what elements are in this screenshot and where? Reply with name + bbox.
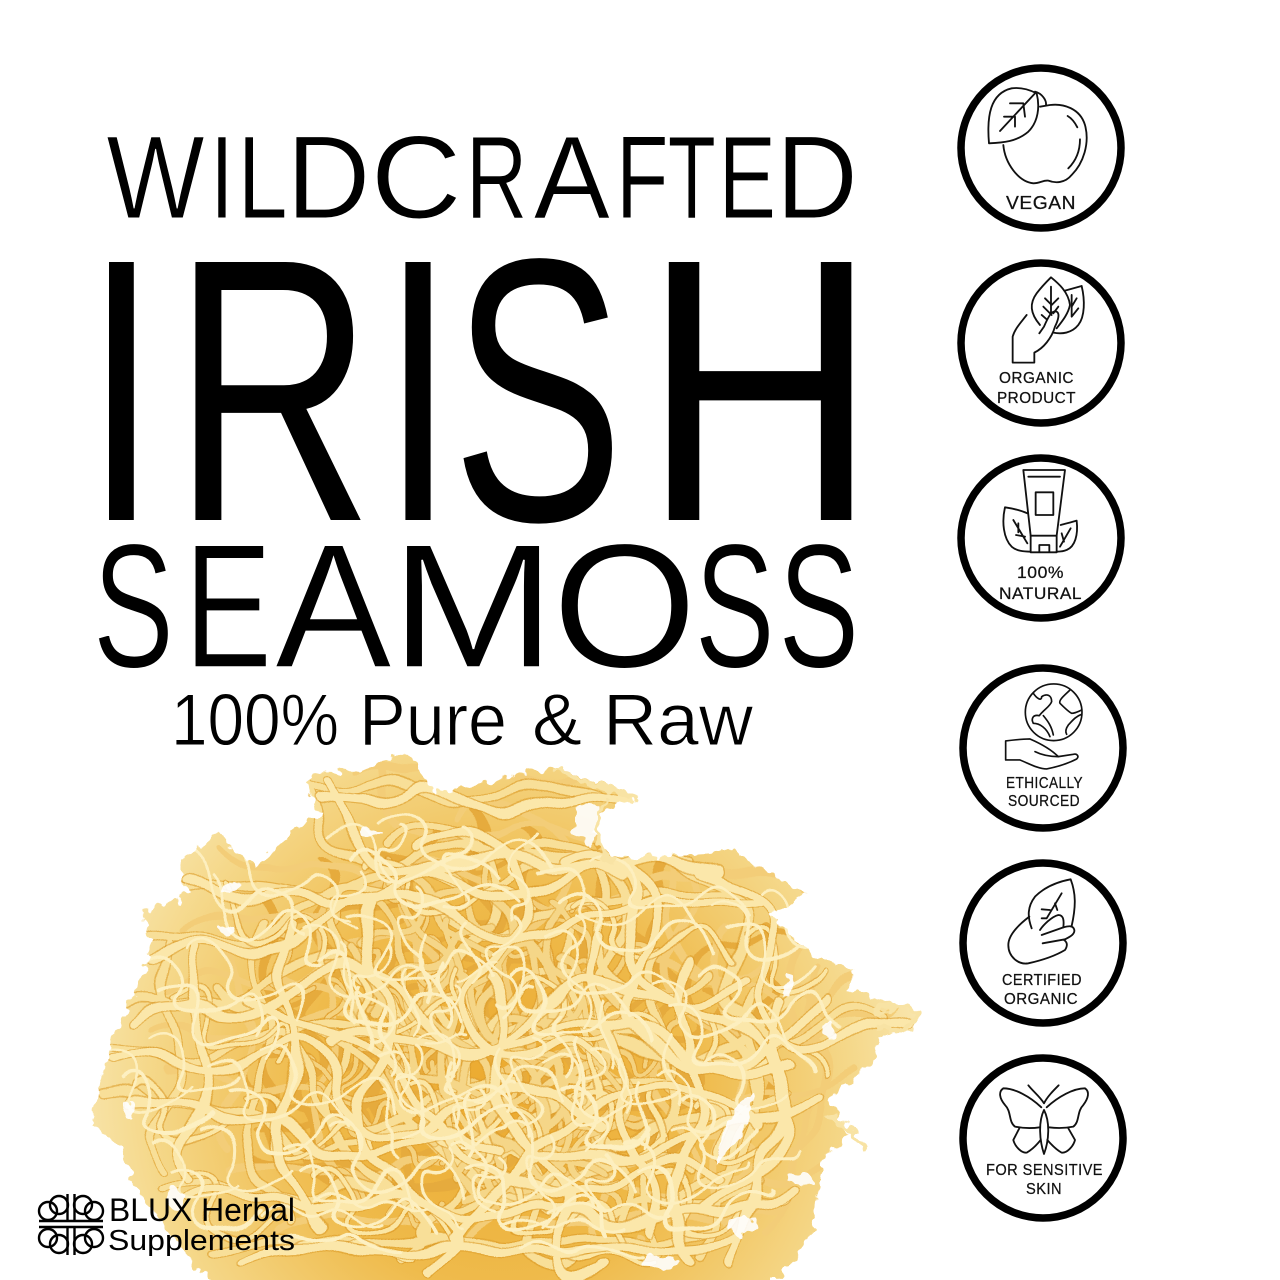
title: seamoss: A [275, 507, 392, 705]
title: irish: I [84, 182, 158, 600]
title: irish: H [642, 182, 878, 600]
logo text [108, 1192, 295, 1257]
icon: butterfly [1000, 1085, 1088, 1154]
label: ethically sourced [1006, 775, 1083, 810]
title: seamoss: S [695, 507, 775, 705]
title: wildcrafted: E [718, 112, 776, 244]
title: seamoss: E [184, 507, 272, 705]
title: wildcrafted: D [286, 112, 370, 244]
label: for sensitive skin: SKIN [1026, 1181, 1062, 1198]
label: organic product [997, 370, 1076, 407]
label: 100% natural: NATURAL [999, 584, 1082, 603]
icon: hand and leaf [1008, 879, 1075, 964]
badge: vegan [961, 68, 1121, 228]
label: 100% natural: 100% [1017, 563, 1064, 582]
label: for sensitive skin: FOR SENSITIVE [986, 1162, 1103, 1179]
badge: organic product [961, 263, 1121, 423]
subtitle: & [532, 680, 582, 761]
label: ethically sourced: SOURCED [1008, 793, 1080, 810]
badge: certified organic [963, 863, 1123, 1023]
title: wildcrafted: R [466, 112, 528, 244]
title: irish: I [380, 182, 456, 600]
logo text: BLUX Herbal [109, 1192, 295, 1228]
label: organic product: ORGANIC [999, 370, 1074, 387]
subtitle: Pure [359, 680, 507, 761]
badge: 100% natural [961, 458, 1121, 618]
logo text: Supplements [108, 1225, 295, 1257]
label: certified organic: ORGANIC [1004, 991, 1078, 1008]
title: wildcrafted: I [210, 112, 234, 244]
title: wildcrafted: C [371, 112, 462, 244]
icon: tube with leaves [1003, 470, 1077, 552]
badge: for sensitive skin [963, 1058, 1123, 1218]
title: wildcrafted: F [616, 112, 669, 244]
logo: blux herbal supplements [39, 1192, 295, 1257]
title: irish: S [452, 182, 624, 600]
logo mark [39, 1194, 103, 1255]
title: seamoss: S [778, 507, 859, 705]
seaweed tendrils [558, 770, 918, 1150]
seaweed photo [80, 740, 943, 1280]
icon: hand holding leaves [1013, 277, 1084, 363]
title: wildcrafted: D [776, 112, 858, 244]
label: 100% natural [999, 563, 1082, 603]
label: certified organic [1002, 972, 1082, 1008]
label: certified organic: CERTIFIED [1002, 972, 1082, 989]
title: irish: R [173, 182, 374, 600]
title: seamoss: O [552, 507, 697, 705]
label: organic product: PRODUCT [997, 390, 1076, 407]
badge: ethically sourced [963, 668, 1123, 828]
title: wildcrafted: A [534, 112, 610, 244]
title: seamoss: S [93, 507, 174, 705]
subtitle: 100% [171, 680, 339, 761]
label: vegan: VEGAN [1006, 193, 1076, 213]
subtitle: Raw [603, 680, 753, 761]
icon: apple and leaf [988, 88, 1087, 183]
title: wildcrafted: T [668, 112, 716, 244]
title: wildcrafted: L [238, 112, 288, 244]
icon: globe in hand [1006, 684, 1082, 769]
label: for sensitive skin [986, 1162, 1103, 1198]
title: seamoss: M [390, 507, 556, 705]
title: wildcrafted: W [106, 112, 204, 244]
label: ethically sourced: ETHICALLY [1006, 775, 1083, 792]
